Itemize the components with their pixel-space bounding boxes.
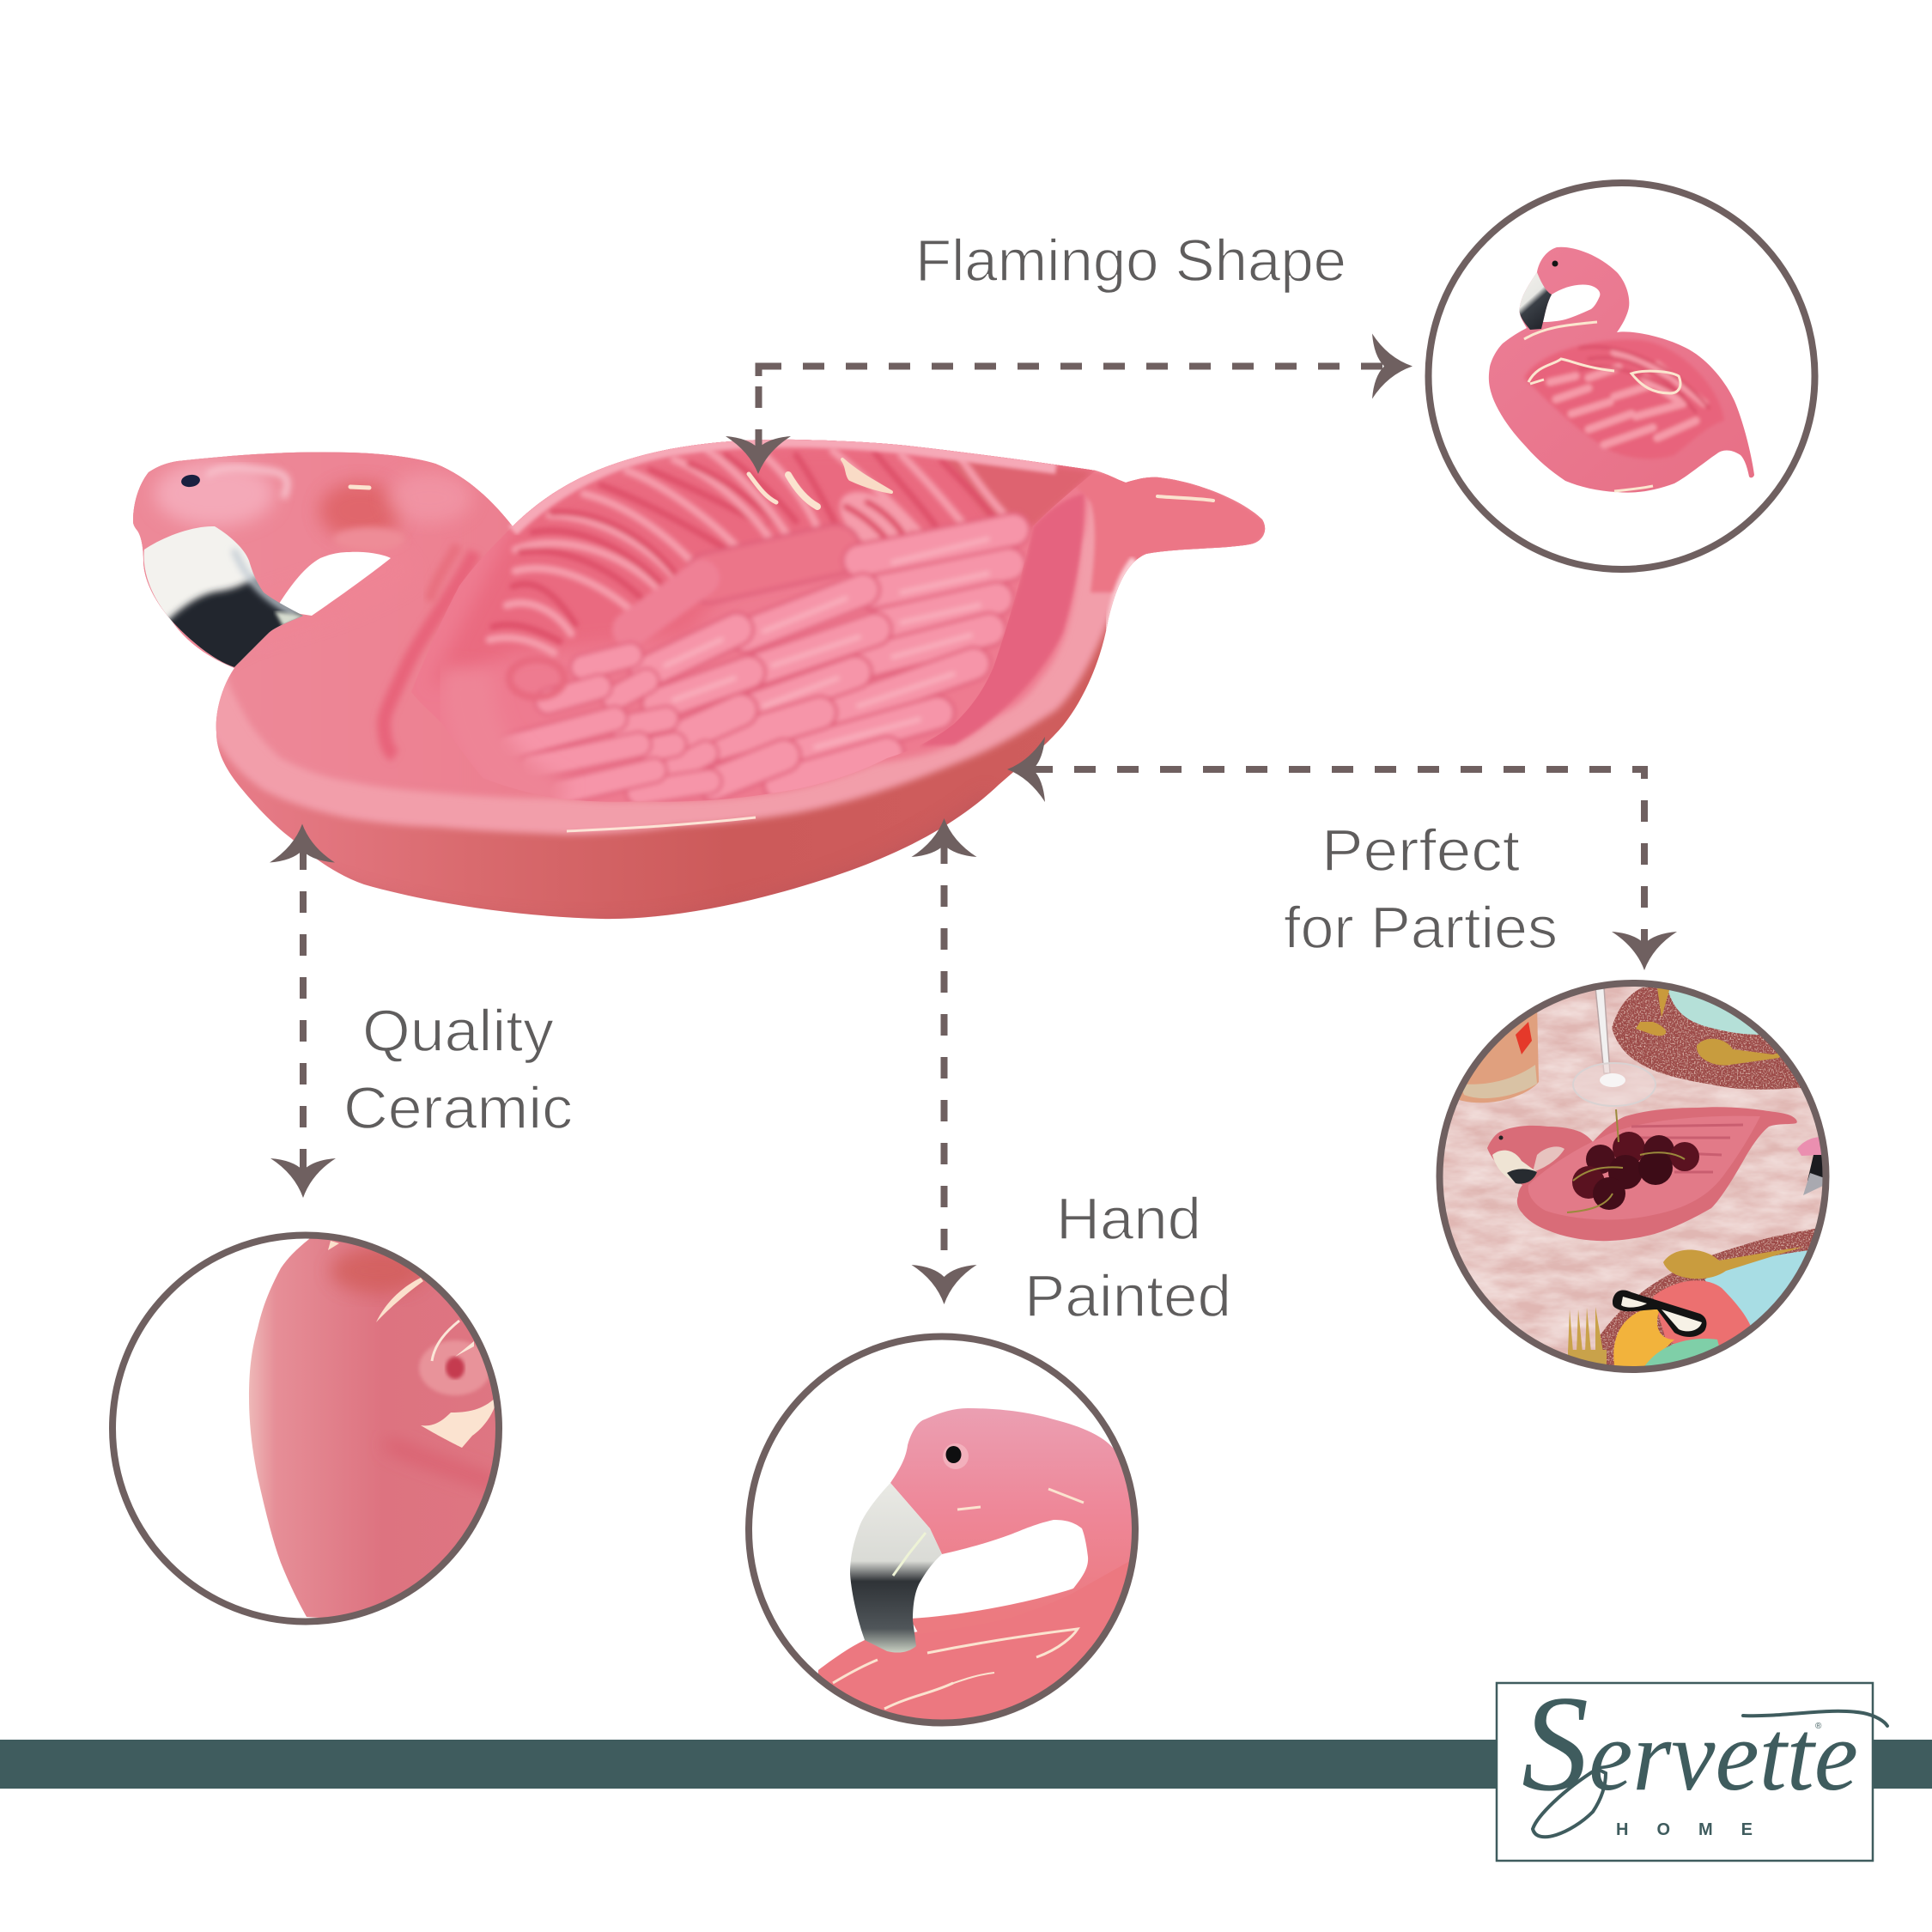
close-up lower body — [816, 1537, 1142, 1726]
arrow to party circle — [1612, 932, 1677, 970]
neck opening — [279, 552, 391, 616]
bottle highlight — [1460, 1065, 1537, 1098]
mini beak — [1492, 1151, 1537, 1183]
connector: parties — [1007, 737, 1677, 970]
mini dish feathers — [1619, 1125, 1743, 1172]
glaze highlights — [567, 459, 1213, 831]
logo wordmark: Servette — [1522, 1667, 1858, 1820]
arrow down to circle — [270, 1158, 336, 1198]
velvet tablecloth — [1434, 979, 1833, 1378]
label: Perfect for Parties: for Parties — [1284, 895, 1558, 961]
tail — [1078, 471, 1266, 594]
cherries — [1572, 1132, 1699, 1210]
interior — [133, 440, 1090, 804]
plate top — [1668, 970, 1812, 1043]
logo frame — [1497, 1683, 1873, 1861]
glitter placemat bottom — [1597, 1226, 1829, 1378]
gold spoon — [1663, 1247, 1803, 1279]
curled feather — [509, 659, 564, 697]
tertiaries — [639, 629, 749, 793]
blue plate — [1704, 1247, 1833, 1340]
label: Perfect for Parties — [1284, 817, 1558, 961]
parrot body — [1640, 1339, 1726, 1374]
close-up eye — [943, 1443, 969, 1469]
parrot beak — [1613, 1305, 1674, 1374]
connector: hand painted — [912, 818, 977, 1304]
dish outer band — [133, 440, 1265, 919]
dish surface and rim — [133, 440, 1266, 919]
mini eye — [1499, 1135, 1503, 1140]
bottle stopper — [1797, 1137, 1829, 1195]
connector: ceramic — [270, 824, 336, 1198]
label: Quality Ceramic: Ceramic — [343, 1075, 573, 1141]
label: Hand Painted: Painted — [1024, 1263, 1231, 1329]
top view dish — [1489, 247, 1754, 493]
ceramic swirl — [331, 1249, 498, 1485]
cherry stems — [1567, 1109, 1685, 1212]
tail light edge — [1108, 560, 1135, 635]
bottom band — [0, 1740, 1932, 1789]
covert ring — [630, 578, 702, 629]
top view eye — [1552, 261, 1558, 266]
covert ribs — [489, 448, 1013, 653]
logo reg mark: ® — [1815, 1722, 1822, 1731]
arrow into dish top — [726, 436, 791, 474]
top view beak — [1520, 272, 1552, 330]
logo swash — [1743, 1711, 1887, 1726]
top view neck opening — [1543, 285, 1600, 322]
mini dish interior — [1528, 1116, 1760, 1219]
top view wing — [1524, 339, 1724, 459]
ceramic glaze highlights — [328, 1241, 498, 1448]
close-up beak — [850, 1483, 942, 1653]
arrow into dish rim — [1007, 737, 1045, 802]
arrow down to circle — [912, 1265, 977, 1304]
wine glass — [1573, 987, 1656, 1106]
ceramic surface — [249, 1219, 515, 1631]
wing with feathers — [404, 429, 1108, 816]
close-up glaze highlights — [833, 1489, 1084, 1709]
head tint and neck shading — [155, 461, 475, 756]
glitter placemat top — [1612, 970, 1838, 1090]
lower left fade — [467, 670, 558, 807]
band shading — [567, 795, 987, 919]
inner rib cluster — [837, 489, 913, 544]
parrot plate head — [1653, 1280, 1753, 1365]
close-up neck and head — [890, 1408, 1142, 1634]
wing edge light — [513, 441, 1056, 531]
logo tail — [1533, 1769, 1606, 1837]
bottle label — [1516, 1022, 1532, 1054]
rose bottle — [1425, 1005, 1539, 1103]
beak — [144, 526, 303, 667]
corner tone — [949, 460, 1093, 526]
circle: hand painted close-up — [749, 1336, 1142, 1726]
arrow to circle — [1372, 333, 1413, 398]
gold fork — [1568, 1307, 1607, 1365]
label: Hand Painted: Hand — [1056, 1186, 1201, 1252]
rim — [133, 452, 1266, 838]
circle: party table scene — [1425, 970, 1838, 1378]
circle: ceramic close-up — [112, 1219, 515, 1631]
arrow up to dish — [912, 818, 977, 857]
top view glaze — [1524, 322, 1680, 491]
neck glaze — [350, 487, 369, 488]
upper wing tone — [440, 448, 984, 673]
sunglasses — [1613, 1290, 1706, 1337]
primaries — [781, 530, 1013, 784]
logo subline: HOME — [1616, 1820, 1753, 1839]
circle: flamingo top view — [1429, 183, 1815, 569]
mini flamingo dish — [1487, 1107, 1797, 1241]
feather sheen — [665, 539, 987, 747]
mini neck opening — [1533, 1146, 1564, 1172]
inner dark strip — [920, 494, 1084, 746]
eye — [180, 474, 201, 488]
large covert — [709, 550, 835, 578]
label: Flamingo Shape: Flamingo Shape — [915, 228, 1346, 294]
small scallops — [508, 655, 674, 793]
logo: Servette Home — [1497, 1667, 1887, 1861]
connector: flamingo shape — [726, 333, 1413, 474]
gold cutlery top — [1636, 987, 1782, 1066]
label: Hand Painted — [1024, 1186, 1231, 1329]
arrow up to dish — [270, 824, 335, 862]
label: Perfect for Parties: Perfect — [1321, 817, 1520, 884]
mini beak tip — [1507, 1169, 1537, 1184]
label: Quality Ceramic: Quality — [362, 998, 555, 1064]
secondaries — [714, 590, 875, 784]
main product photo: flamingo dish — [133, 440, 1266, 919]
label: Quality Ceramic — [343, 998, 573, 1141]
